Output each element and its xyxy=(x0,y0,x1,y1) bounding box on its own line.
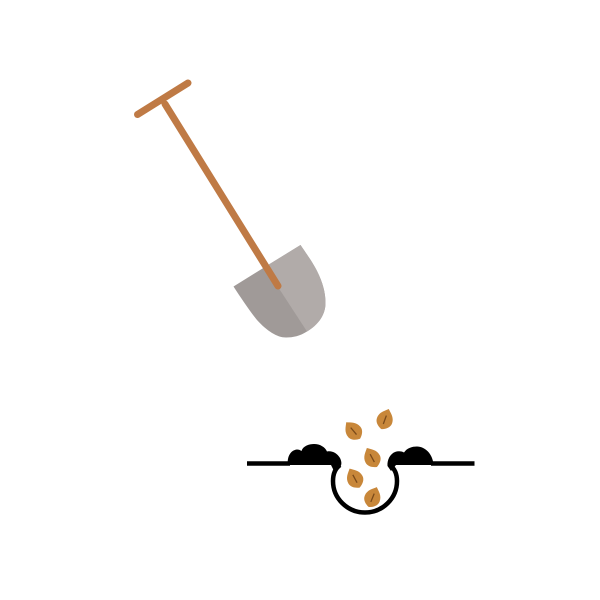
shovel T-grip xyxy=(138,83,188,114)
icon: shovel xyxy=(138,83,326,338)
right soil mound xyxy=(387,446,434,471)
icon: falling seeds xyxy=(340,406,396,510)
shovel handle xyxy=(165,104,278,286)
left soil mound xyxy=(288,444,341,471)
icon: planting hole with soil xyxy=(247,444,474,512)
ground line and hole outline xyxy=(247,464,474,512)
seed 5 xyxy=(361,484,384,510)
seed 4 xyxy=(342,465,367,491)
seed 2 xyxy=(340,417,366,444)
seed 1 xyxy=(374,406,396,432)
shovel blade xyxy=(234,245,326,338)
seed 3 xyxy=(360,444,384,471)
